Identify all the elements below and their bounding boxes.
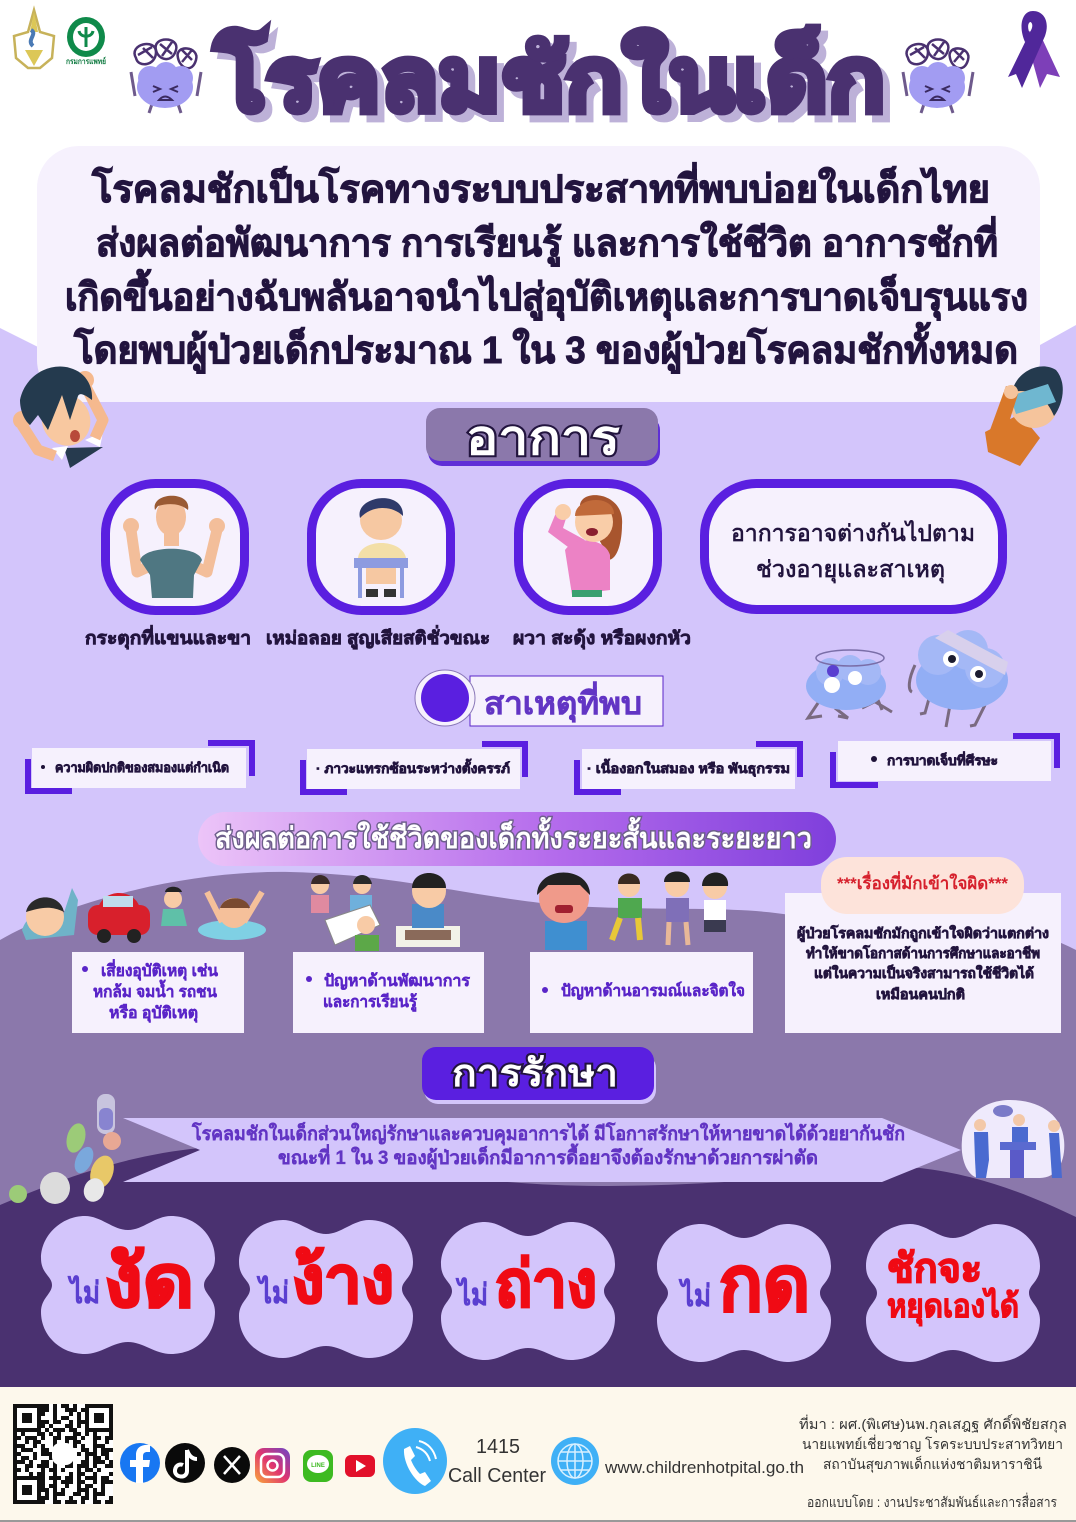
slogan: seizure stops by itself — [866, 1224, 1040, 1362]
effect: emotion and mind: ปัญหาด้านอารมณ์และจิตใจ — [561, 981, 745, 1001]
note: symptoms vary — [704, 484, 1002, 610]
illustrations: learning problems — [311, 873, 460, 951]
hotline: 1415 — [476, 1436, 520, 1458]
slogan: seizure stops by itself: หยุดเองได้ — [887, 1287, 1019, 1327]
effect: development and learning: ปัญหาด้านพัฒนาการ — [324, 972, 470, 991]
icon: brain character left — [131, 40, 201, 113]
icon: injured brain with bandage — [909, 630, 1008, 727]
cause 3 — [577, 744, 800, 792]
heading: symptoms: อาการ — [466, 412, 620, 465]
symptom: staring blankly — [266, 484, 490, 650]
misconception label — [821, 857, 1024, 914]
cause 4 — [833, 736, 1057, 785]
illustration: man shaking — [123, 496, 225, 598]
title: โรคลมชักในเด็ก — [221, 33, 892, 136]
misconception text: ทำให้ขาดโอกาสด้านการศึกษาและอาชีพ — [806, 944, 1040, 961]
slogan: do not press — [657, 1224, 831, 1362]
illustrations: emotional problems — [537, 872, 728, 950]
icon: globe — [551, 1437, 599, 1485]
logo: department of medical services — [66, 17, 106, 66]
illustration: startled girl — [548, 495, 622, 597]
arrow banner: treatment information: โรคลมชักในเด็กส่วนใหญ่รักษาและควบคุมอาการได้ มีโอกาสรักษาให้หายขาดได้ด้วยยากันชัก — [191, 1121, 905, 1146]
slogan: do not restrain — [41, 1216, 215, 1354]
hotline — [448, 1436, 546, 1487]
misconception text: แต่ในความเป็นจริงสามารถใช้ชีวิตได้ — [814, 964, 1034, 981]
effect: development and learning — [293, 952, 484, 1033]
note: symptoms vary: ช่วงอายุและสาเหตุ — [756, 556, 945, 583]
cause 1 — [28, 743, 252, 791]
icon: surgery team — [962, 1100, 1064, 1178]
icon: child with headache left — [13, 367, 103, 468]
slogan: do not restrain: ไม่ — [67, 1275, 100, 1310]
slogan: do not press: กด — [719, 1242, 810, 1327]
symptom: startle and head nodding — [513, 484, 691, 650]
effect: emotion and mind — [530, 952, 753, 1033]
icon: brain character right — [903, 40, 973, 113]
heading: effects on child's life — [198, 812, 836, 866]
slogan: do not restrain: งัด — [104, 1242, 194, 1322]
footer — [0, 1387, 1076, 1522]
effect: accidents: หกล้ม จมน้ำ รถชน — [93, 979, 217, 1001]
misconception text: เหมือนคนปกติ — [876, 986, 965, 1002]
panel: common misconception — [785, 857, 1061, 1033]
heading: causes found — [415, 670, 663, 726]
misconception text — [797, 924, 1049, 1002]
website: www.childrenhotpital.go.th — [604, 1458, 804, 1477]
cause 3: · เนื้องอกในสมอง หรือ พันธุกรรม — [587, 758, 790, 777]
slogan: do not pry: ง้าง — [292, 1244, 394, 1316]
effect: accidents: หรือ อุบัติเหตุ — [109, 1004, 198, 1023]
icon: X — [214, 1447, 250, 1483]
icon: dizzy brain — [806, 650, 892, 718]
effect: accidents: เสี่ยงอุบัติเหตุ เช่น — [101, 959, 218, 981]
logo: department of medical services: กรมการแพทย์ — [66, 56, 106, 66]
icon: YouTube — [345, 1455, 375, 1477]
title: โรคลมชักในเด็ก — [214, 26, 885, 129]
icon: phone — [383, 1428, 447, 1494]
intro text: โดยพบผู้ป่วยเด็กประมาณ 1 ใน 3 ของผู้ป่วยโรคลมชักทั้งหมด — [73, 322, 1018, 374]
slogan: do not wedge — [441, 1222, 615, 1360]
illustration: boy at desk — [354, 498, 408, 598]
caption: ผวา สะดุ้ง หรือผงกหัว — [513, 628, 691, 650]
cause 1: ความผิดปกติของสมองแต่กำเนิด — [55, 760, 229, 775]
heading: effects on child's life: ส่งผลต่อการใช้ชีวิตของเด็กทั้งระยะสั้นและระยะยาว — [215, 816, 812, 855]
note: symptoms vary: อาการอาจต่างกันไปตาม — [731, 520, 975, 546]
icon: Facebook — [120, 1443, 160, 1483]
icon: purple ribbon — [1008, 11, 1060, 88]
slogan: do not pry — [239, 1220, 413, 1358]
QR code — [13, 1404, 113, 1504]
logo: hospital emblem — [14, 10, 54, 68]
icon: child with headache right — [985, 366, 1063, 466]
misconception text: ผู้ป่วยโรคลมชักมักถูกเข้าใจผิดว่าแตกต่าง — [797, 924, 1049, 942]
icon: pills — [9, 1094, 121, 1205]
cause 4: การบาดเจ็บที่ศีรษะ — [887, 751, 998, 768]
heading: causes found: สาเหตุที่พบ — [484, 681, 642, 723]
cause 2: · ภาวะแทรกซ้อนระหว่างตั้งครรภ์ — [316, 758, 510, 776]
source credit: นายแพทย์เชี่ยวชาญ โรคระบบประสาทวิทยา — [802, 1435, 1063, 1452]
intro text: โรคลมชักเป็นโรคทางระบบประสาทที่พบบ่อยในเด็กไทย — [91, 162, 990, 211]
intro text: เกิดขึ้นอย่างฉับพลันอาจนำไปสู่อุบัติเหตุและการบาดเจ็บรุนแรง — [65, 269, 1028, 321]
heading: treatment: การรักษา — [452, 1053, 618, 1095]
panel: introduction — [37, 146, 1040, 402]
icon: LINE — [303, 1450, 333, 1482]
icon: LINE: LINE — [311, 1463, 325, 1469]
source credit — [799, 1414, 1067, 1510]
heading: symptoms — [426, 408, 660, 466]
slogan: do not press: ไม่ — [678, 1278, 711, 1313]
icon: TikTok — [165, 1443, 205, 1483]
effect: development and learning: และการเรียนรู้ — [323, 992, 417, 1013]
slogan: do not wedge: ไม่ — [455, 1277, 488, 1312]
slogan: seizure stops by itself: ชักจะ — [887, 1247, 982, 1291]
slogan: do not wedge: ถ่าง — [495, 1248, 597, 1320]
source credit: ที่มา : ผศ.(พิเศษ)นพ.กุลเสฎฐ ศักดิ์พิชัยสกุล — [799, 1414, 1067, 1433]
source credit: สถาบันสุขภาพเด็กแห่งชาติมหาราชินี — [823, 1455, 1042, 1473]
caption: เหม่อลอย สูญเสียสติชั่วขณะ — [266, 625, 490, 650]
arrow banner: treatment information: ขณะที่ 1 ใน 3 ของผู้ป่วยเด็กมีอาการดื้อยาจึงต้องรักษาด้วยการผ่าตัด — [278, 1143, 818, 1170]
heading: treatment — [422, 1047, 656, 1104]
intro text: ส่งผลต่อพัฒนาการ การเรียนรู้ และการใช้ชีวิต อาการชักที่ — [96, 216, 998, 267]
icon: Instagram — [255, 1448, 290, 1483]
effect: accidents — [72, 952, 244, 1033]
illustrations: accidents — [22, 887, 266, 943]
symptom: jerking arms and legs — [85, 484, 251, 650]
arrow banner: treatment information — [123, 1118, 961, 1182]
caption: กระตุกที่แขนและขา — [85, 625, 251, 650]
intro text — [65, 162, 1028, 374]
hotline: Call Center — [448, 1465, 546, 1487]
slogan: do not pry: ไม่ — [256, 1275, 289, 1310]
cause 2 — [303, 744, 525, 792]
misconception label: ***เรื่องที่มักเข้าใจผิด*** — [837, 871, 1008, 893]
